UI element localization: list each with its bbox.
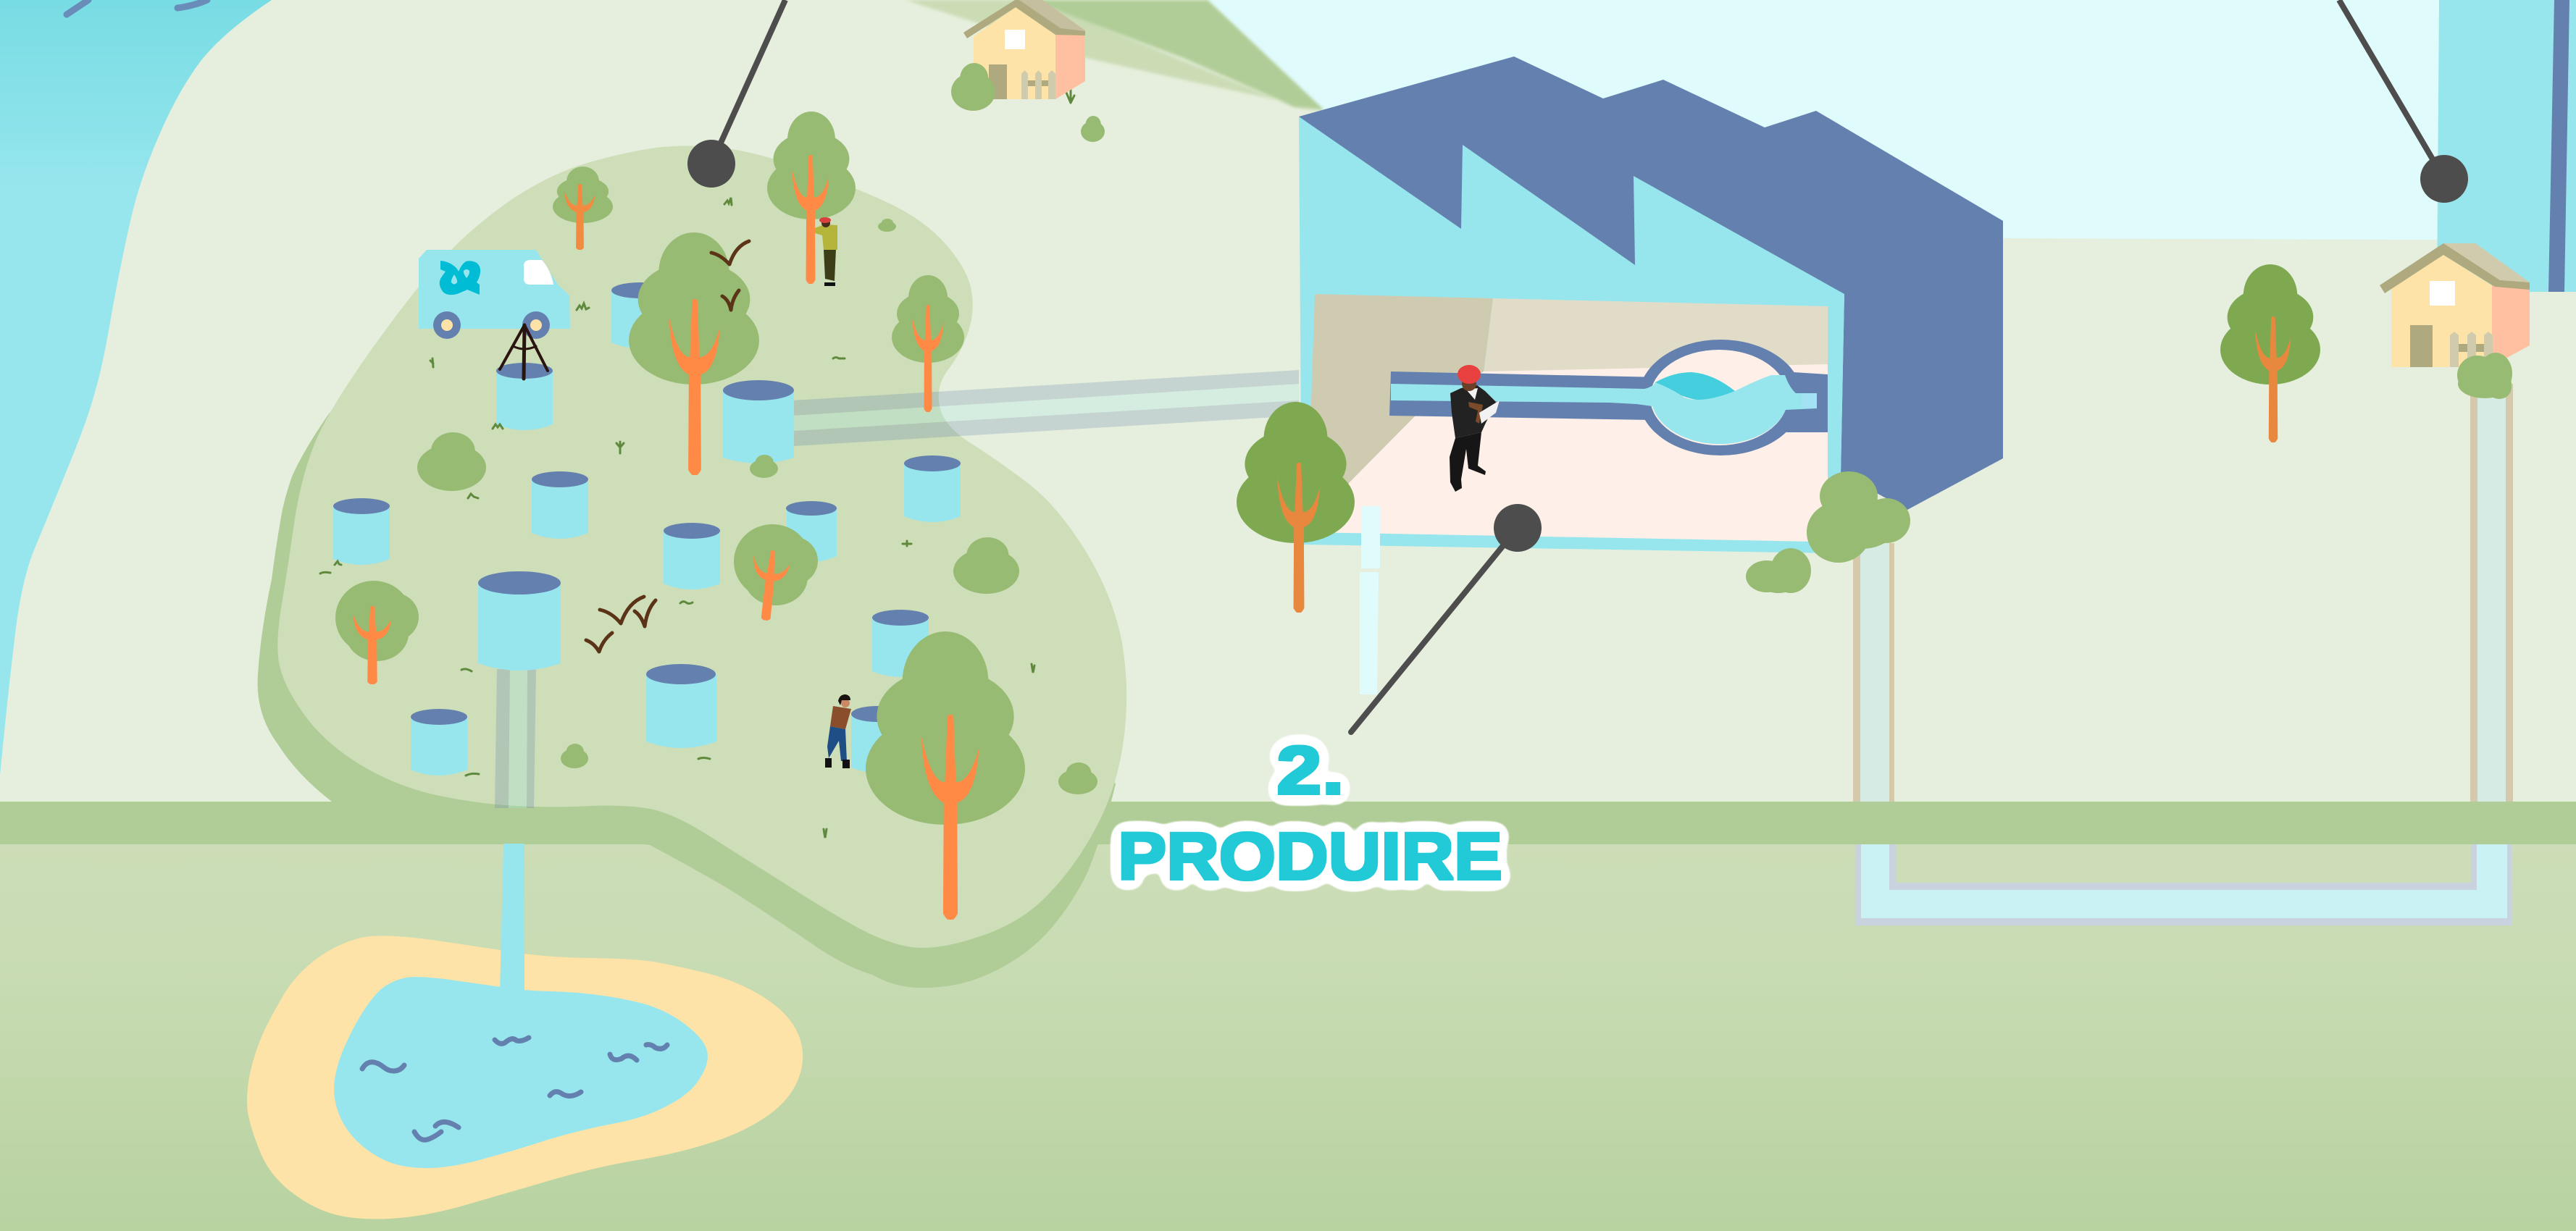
callout pin: factory xyxy=(1351,504,1542,732)
large bush at factory corner xyxy=(1807,471,1910,563)
man torso xyxy=(815,224,837,250)
ground above the road xyxy=(0,0,2576,802)
well field hill xyxy=(277,146,1126,948)
engineer jacket xyxy=(1450,385,1496,438)
right house front wall xyxy=(2391,255,2492,367)
right house side wall xyxy=(2492,285,2530,367)
basin deep wave xyxy=(1655,372,1735,400)
cylinder well left xyxy=(333,498,390,565)
top house fence xyxy=(1021,70,1055,99)
small bush under top house xyxy=(1081,116,1105,142)
tree, upper right of hill xyxy=(892,275,964,413)
step title: PRODUIRE xyxy=(1118,820,1502,894)
main factory xyxy=(1299,56,2003,553)
right house fence xyxy=(2450,332,2493,367)
right house door xyxy=(2410,325,2433,367)
man in yellow sweater xyxy=(815,217,837,286)
van rear wheel xyxy=(433,311,461,339)
cylinder well behind round tree xyxy=(786,501,837,562)
top house xyxy=(963,0,1085,99)
lake xyxy=(247,936,803,1219)
distant hill, dark wedge xyxy=(1030,0,1324,110)
basin walls xyxy=(1389,340,1828,455)
van xyxy=(419,250,570,339)
woman legs xyxy=(827,726,847,761)
hill shadow outline xyxy=(258,413,1116,988)
woman torso xyxy=(830,706,851,729)
round tree, left xyxy=(335,581,419,685)
top house front wall xyxy=(974,7,1055,99)
lake water xyxy=(334,977,708,1168)
engineer forearm xyxy=(1468,402,1483,424)
road band xyxy=(0,802,2576,844)
bush at top house xyxy=(951,63,995,111)
top house door xyxy=(989,64,1007,99)
engineer shirt xyxy=(1466,388,1478,400)
cylinder well right xyxy=(904,455,961,522)
basin interior xyxy=(1650,350,1788,445)
man shoes xyxy=(824,282,835,286)
factory front wall xyxy=(1299,117,1844,553)
treatment basin xyxy=(1389,340,1828,455)
factory inner side wall xyxy=(1310,294,1493,532)
right building blue edge xyxy=(2548,0,2569,292)
lake ripples xyxy=(362,1038,667,1140)
top house side wall xyxy=(1055,34,1085,99)
distant hill, light wedge xyxy=(906,0,1321,111)
smaller bush at factory corner xyxy=(1746,548,1811,593)
large tree, bottom of hill xyxy=(866,631,1025,920)
water tower cylinder xyxy=(478,571,561,671)
small bush, lower right of hill xyxy=(1058,762,1097,794)
right vertical trench xyxy=(2470,384,2513,802)
cylinder well centre xyxy=(664,523,720,589)
engineer face xyxy=(1462,377,1476,391)
factory roof and side xyxy=(1299,56,2003,510)
tree with man xyxy=(767,112,856,285)
bush on hill, upper left xyxy=(417,432,486,491)
top house roof slope xyxy=(1019,0,1085,35)
small tree, top left xyxy=(553,167,613,250)
callout pin: wells xyxy=(687,0,785,188)
river on the left xyxy=(0,0,304,802)
engineer document xyxy=(1479,400,1500,424)
sky xyxy=(0,0,2576,802)
callout pin: right building xyxy=(2339,0,2468,203)
bush at right house xyxy=(2457,353,2512,399)
basin outlet xyxy=(1802,393,1817,408)
flying birds xyxy=(586,241,749,652)
pipe water xyxy=(1861,844,2507,918)
heading: step number and title xyxy=(1118,732,1502,894)
left vertical trench xyxy=(1853,543,1894,802)
small bush by trench xyxy=(750,455,778,478)
cylinder well by trench xyxy=(723,380,794,463)
cylinder well lower centre xyxy=(646,664,716,748)
small bush under tower xyxy=(561,744,588,768)
basin water channel xyxy=(1391,375,1817,444)
grass tufts xyxy=(320,83,1074,838)
van logo xyxy=(440,261,480,295)
factory floor xyxy=(1310,364,1828,542)
factory back wall xyxy=(1484,298,1828,373)
engineer with hard hat xyxy=(1450,365,1500,492)
right house window xyxy=(2430,281,2455,306)
top house roof edge xyxy=(963,0,1085,38)
pale vertical pipe under factory xyxy=(1360,506,1380,694)
woman in brown sweater xyxy=(825,694,851,768)
cylinder well behind large tree xyxy=(872,610,929,677)
cylinder well behind big tree xyxy=(611,282,668,348)
top house window xyxy=(1005,30,1025,49)
river ripples xyxy=(67,0,207,14)
engineer hard hat xyxy=(1458,365,1481,384)
man legs xyxy=(824,249,836,281)
tree in front of factory xyxy=(1237,402,1355,613)
man cap xyxy=(819,217,831,223)
tree on the right field xyxy=(2220,264,2320,443)
right house xyxy=(2380,243,2530,367)
round tree, centre xyxy=(734,524,818,623)
woman face xyxy=(841,699,850,707)
cylinder well centre-left xyxy=(532,471,588,539)
pipe inner edge xyxy=(1889,844,2477,890)
tiny bush near man xyxy=(878,219,896,232)
bush on hill, right xyxy=(953,537,1019,594)
lower field xyxy=(0,840,2576,1231)
right building wall xyxy=(2437,0,2576,292)
underground pipe U-shape xyxy=(1855,844,2512,925)
trench from water tower to road xyxy=(495,669,536,808)
van front wheel xyxy=(522,311,550,339)
van body xyxy=(419,250,570,329)
drilling tripod xyxy=(500,325,548,379)
lake sand shore xyxy=(247,936,803,1219)
woman shoes xyxy=(825,758,850,768)
right building xyxy=(2437,0,2576,292)
van window xyxy=(524,260,553,285)
cylinder well behind lower tree xyxy=(851,706,902,773)
trench from wells to factory xyxy=(792,370,1299,446)
big central tree xyxy=(629,232,759,476)
right house roof edge xyxy=(2380,243,2530,293)
cylinder well under tripod xyxy=(496,363,553,430)
cylinder well lower left xyxy=(411,709,467,776)
engineer legs xyxy=(1450,432,1486,492)
step number: 2. xyxy=(1276,732,1345,808)
pipe outer edge xyxy=(1855,844,2512,925)
pipe inner ground xyxy=(1897,844,2471,883)
right house roof slope xyxy=(2443,243,2530,290)
woman hair xyxy=(838,694,850,705)
stream into the lake xyxy=(500,844,524,992)
man head xyxy=(821,219,830,227)
